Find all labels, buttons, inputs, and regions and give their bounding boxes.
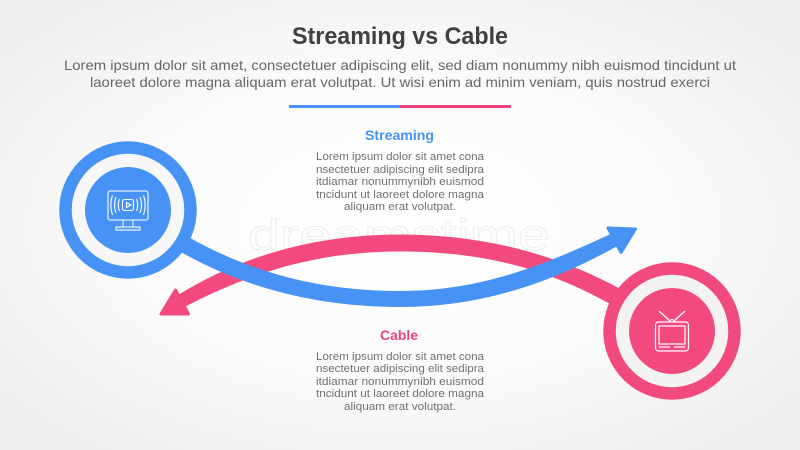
icon: streaming monitor (108, 191, 148, 230)
text block: streaming: tncidunt ut laoreet dolore magna (316, 189, 485, 201)
text block: streaming: nsectetuer adipiscing elit sedipra (316, 164, 485, 176)
text block: cable: aliquam erat volutpat. (344, 401, 456, 413)
heading: streaming: Streaming (365, 127, 434, 143)
intro text: Lorem ipsum dolor sit amet, consectetuer adipiscing elit, sed diam nonummy nibh euismod tincidunt ut (64, 57, 736, 73)
text block: cable: itdiamar nonummynibh euismod (316, 376, 484, 388)
text block: cable: nsectetuer adipiscing elit sedipra (316, 363, 485, 375)
watermark: dreamstime (248, 211, 550, 260)
title: Streaming vs Cable (292, 23, 508, 50)
text block: cable (316, 351, 485, 413)
text block: streaming (316, 151, 485, 213)
text block: streaming: Lorem ipsum dolor sit amet cona (316, 151, 485, 163)
arrow: streaming curve (178, 228, 636, 307)
icon: television (656, 311, 688, 351)
node: cable (610, 268, 734, 394)
text block: cable: tncidunt ut laoreet dolore magna (316, 388, 485, 400)
node: streaming (66, 148, 190, 272)
intro text (64, 57, 736, 90)
heading: cable: Cable (380, 327, 418, 343)
intro text: laoreet dolore magna aliquam erat volutpat. Ut wisi enim ad minim veniam, quis nostrud exerci (90, 74, 710, 90)
title divider (289, 105, 511, 108)
text block: streaming: aliquam erat volutpat. (344, 201, 456, 213)
text block: cable: Lorem ipsum dolor sit amet cona (316, 351, 485, 363)
arrow: cable curve (161, 234, 622, 314)
text block: streaming: itdiamar nonummynibh euismod (316, 176, 484, 188)
